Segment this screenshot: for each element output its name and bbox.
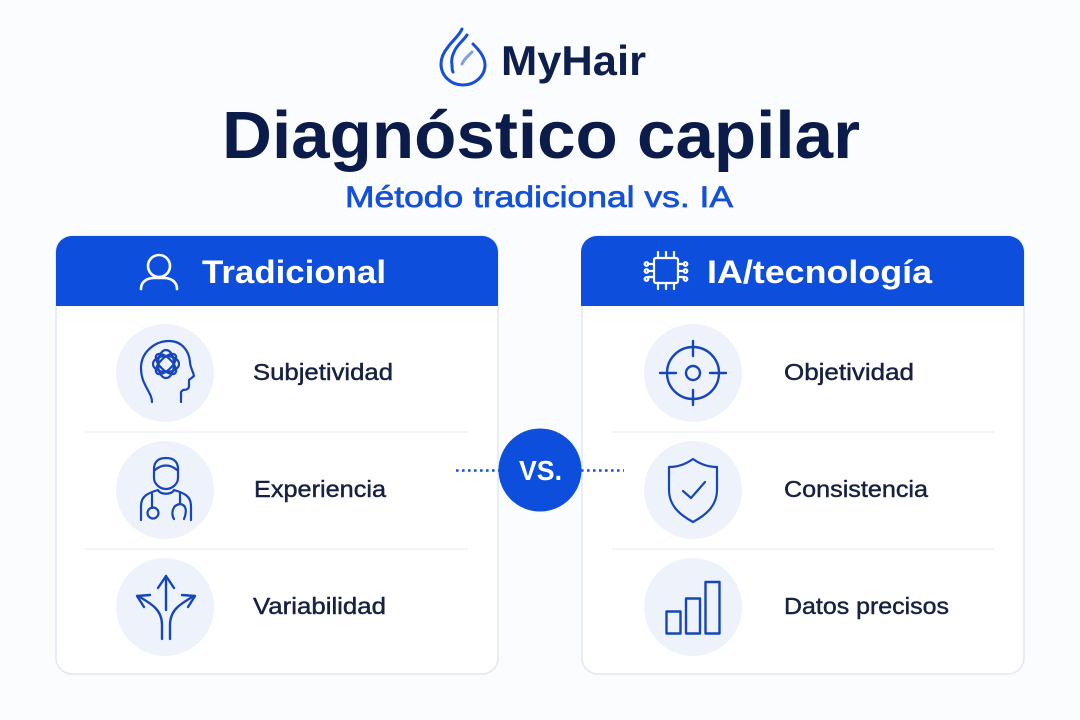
brand name: MyHair <box>501 37 646 84</box>
label: Variabilidad <box>253 593 386 619</box>
icon: shield check <box>644 441 742 539</box>
panel heading: IA/tecnología <box>707 254 932 290</box>
row: Subjetividad <box>116 324 393 422</box>
label: Datos precisos <box>784 593 949 619</box>
icon: diverging arrows <box>116 558 214 656</box>
label: Subjetividad <box>253 359 393 385</box>
row: Consistencia <box>644 441 928 539</box>
logo: MyHair <box>441 29 646 85</box>
icon: head with brain <box>116 324 214 422</box>
badge circle <box>498 428 582 512</box>
panel body <box>56 236 498 674</box>
vs. badge <box>456 428 624 512</box>
panel: Tradicional <box>56 236 498 674</box>
panel header <box>581 236 1024 306</box>
subtitle: Método tradicional vs. IA <box>345 181 733 214</box>
row: Experiencia <box>116 441 386 539</box>
panel: IA/tecnología <box>581 236 1024 674</box>
panel header <box>56 236 498 306</box>
dotted connector right <box>581 469 624 472</box>
icon: target <box>644 324 742 422</box>
title: Diagnóstico capilar <box>222 98 860 173</box>
icon: hair drop <box>441 29 485 85</box>
label: Experiencia <box>254 476 386 502</box>
dotted connector left <box>456 469 499 472</box>
icon: chip <box>645 252 687 289</box>
panel heading: Tradicional <box>202 254 386 290</box>
panel body <box>582 236 1024 674</box>
label: Objetividad <box>784 359 914 385</box>
label: Consistencia <box>784 476 928 502</box>
row: Variabilidad <box>116 558 386 656</box>
row: Objetividad <box>644 324 914 422</box>
icon: doctor <box>116 441 214 539</box>
badge text: VS. <box>519 455 562 486</box>
row: Datos precisos <box>644 558 949 656</box>
icon: person <box>141 255 177 289</box>
icon: bar chart <box>644 558 742 656</box>
